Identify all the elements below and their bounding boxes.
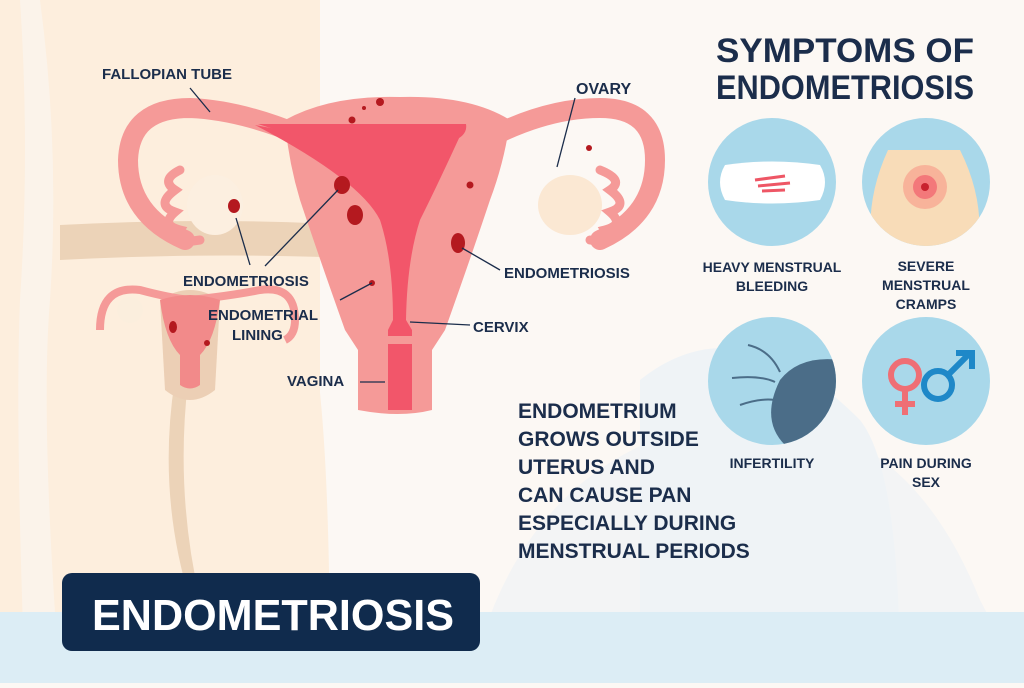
anatomy labels with leader lines: ENDOMETRIAL <box>208 307 318 324</box>
title banner <box>62 573 480 651</box>
description text: CAN CAUSE PAN <box>518 484 691 507</box>
description text: ENDOMETRIUM <box>518 400 677 423</box>
fallopian tubes <box>128 108 300 240</box>
ovaries <box>187 175 243 235</box>
symptom: cramps: MENSTRUAL <box>882 277 970 293</box>
anatomy labels with leader lines: OVARY <box>576 81 631 98</box>
anatomy labels with leader lines: VAGINA <box>287 373 344 390</box>
symptom: pain during sex: SEX <box>912 474 941 490</box>
description text: ESPECIALLY DURING <box>518 512 736 535</box>
anatomy labels with leader lines: ENDOMETRIOSIS <box>183 273 309 290</box>
description text <box>518 400 750 563</box>
anatomy labels with leader lines: CERVIX <box>473 319 529 336</box>
symptom: pain during sex: PAIN DURING <box>880 455 972 471</box>
symptom: pain during sex <box>862 317 990 490</box>
symptom: heavy bleeding <box>703 118 842 294</box>
symptom: heavy bleeding: HEAVY MENSTRUAL <box>703 259 842 275</box>
symptom: cramps: SEVERE <box>898 258 954 274</box>
symptom: cramps <box>862 118 990 312</box>
anatomy labels with leader lines: FALLOPIAN TUBE <box>102 66 232 83</box>
small uterus illustration <box>100 289 295 600</box>
endometriosis spots <box>228 98 592 286</box>
symptom: cramps: CRAMPS <box>896 296 956 312</box>
heading: symptoms: SYMPTOMS OF <box>716 32 974 70</box>
heading: symptoms <box>716 32 974 107</box>
symptom: infertility: INFERTILITY <box>730 455 815 471</box>
symptom: infertility <box>708 317 840 471</box>
anatomy labels with leader lines <box>102 66 631 390</box>
symptom: heavy bleeding: BLEEDING <box>736 278 808 294</box>
uterus outer <box>285 97 510 414</box>
uterus diagram <box>128 97 655 414</box>
anatomy labels with leader lines: LINING <box>232 327 283 344</box>
description text: UTERUS AND <box>518 456 655 479</box>
uterus inner cavity <box>255 125 465 410</box>
fimbriae <box>165 170 200 241</box>
description text: MENSTRUAL PERIODS <box>518 540 750 563</box>
title banner: ENDOMETRIOSIS <box>92 591 454 640</box>
description text: GROWS OUTSIDE <box>518 428 699 451</box>
heading: symptoms: ENDOMETRIOSIS <box>716 69 974 107</box>
anatomy labels with leader lines: ENDOMETRIOSIS <box>504 265 630 282</box>
